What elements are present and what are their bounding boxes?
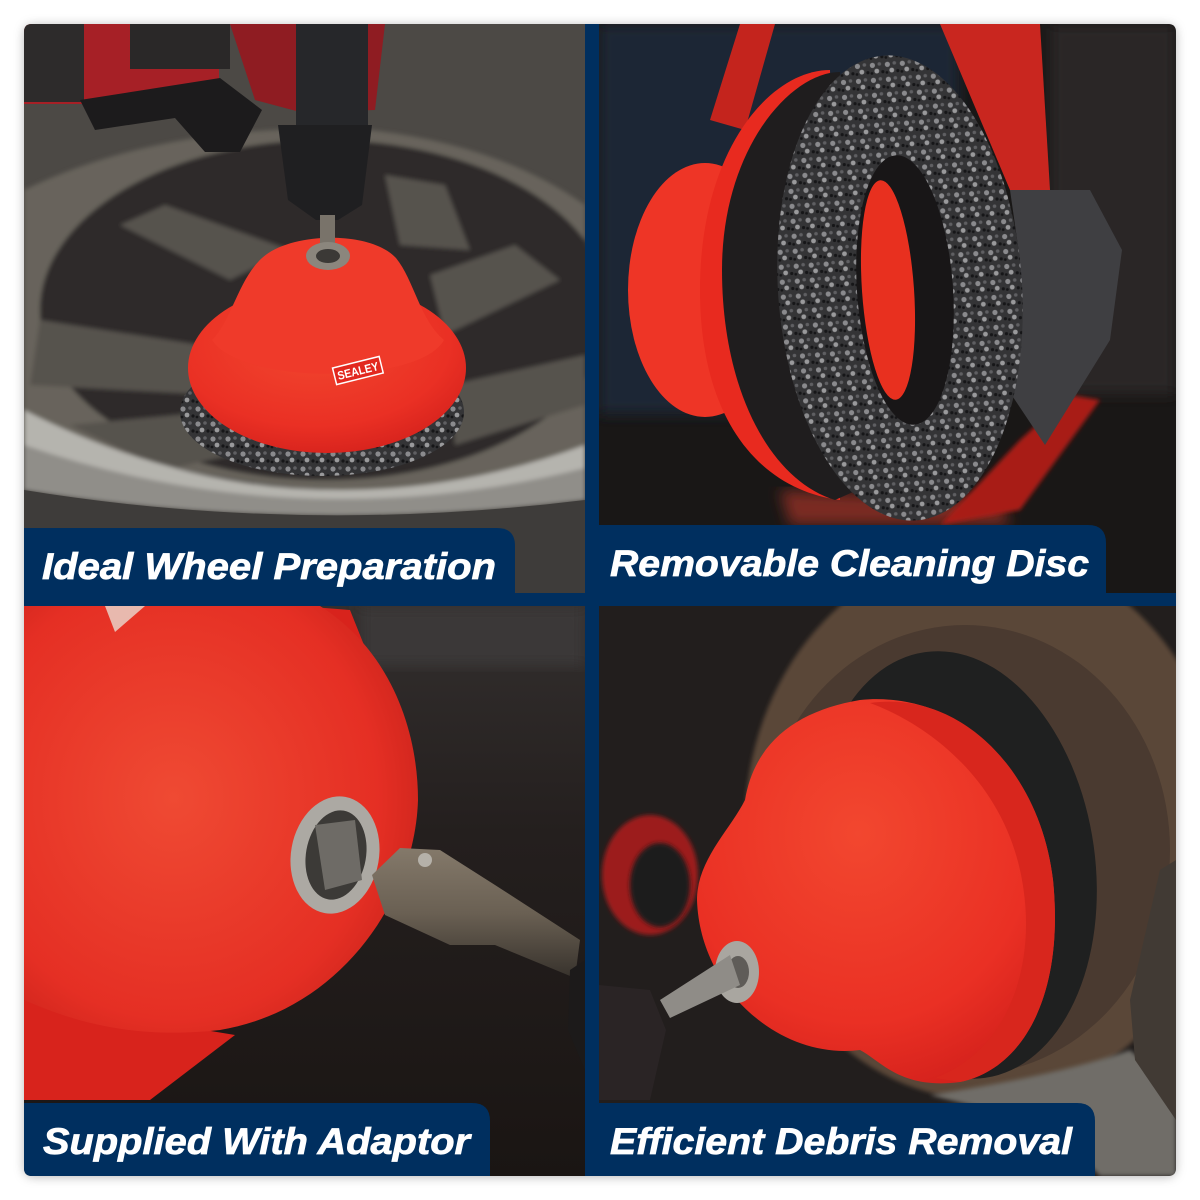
panel: efficient debris removal xyxy=(599,606,1176,1176)
panel: supplied with adaptor xyxy=(24,606,585,1176)
label: supplied with adaptor: Supplied With Adaptor xyxy=(43,1121,473,1162)
drill bit xyxy=(660,941,759,1018)
grit disc ring xyxy=(777,55,1023,521)
panel: ideal wheel preparation xyxy=(24,24,610,593)
wheel rim xyxy=(24,129,610,593)
disc under tool xyxy=(180,387,464,476)
drill xyxy=(24,24,385,270)
background red part xyxy=(602,815,698,935)
label: efficient debris removal: Efficient Debris Removal xyxy=(610,1121,1073,1162)
label: efficient debris removal xyxy=(599,1103,1095,1176)
red applicator body xyxy=(24,606,418,1100)
black disc xyxy=(851,651,1097,1079)
red applicator xyxy=(697,699,1055,1083)
label: ideal wheel preparation xyxy=(24,528,515,593)
label: removable cleaning disc: Removable Cleaning Disc xyxy=(610,543,1089,584)
red applicator xyxy=(188,238,466,453)
panel: removable cleaning disc xyxy=(599,24,1176,593)
logo: SEALEY: SEALEY xyxy=(336,359,380,383)
label: supplied with adaptor xyxy=(24,1103,490,1176)
label: removable cleaning disc xyxy=(599,525,1106,593)
label: ideal wheel preparation: Ideal Wheel Preparation xyxy=(42,546,496,587)
red applicator xyxy=(628,70,852,500)
dividers xyxy=(585,24,599,1176)
socket hole xyxy=(290,796,380,914)
glove xyxy=(1005,190,1122,445)
brake disc xyxy=(744,606,1176,1176)
adaptor xyxy=(372,848,580,976)
